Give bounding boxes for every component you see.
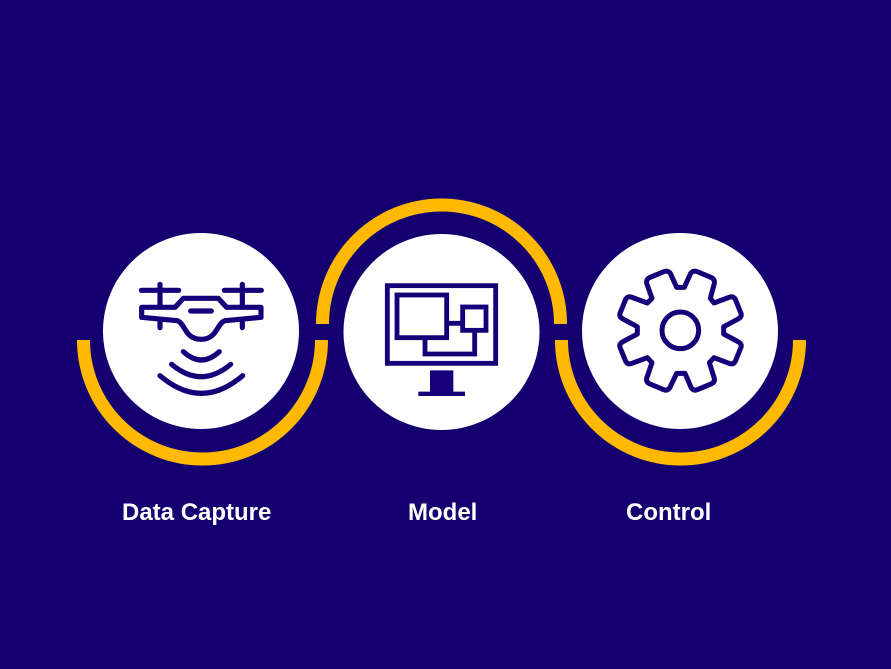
icon: gear bbox=[620, 271, 741, 390]
arc: over model bbox=[322, 205, 560, 324]
icon: monitor with linked blocks bbox=[387, 286, 496, 396]
circle: model bbox=[344, 234, 540, 430]
label: data capture: Data Capture bbox=[122, 499, 271, 526]
arc: under control bbox=[562, 340, 800, 459]
label: model: Model bbox=[408, 499, 477, 526]
icon: drone with signal waves bbox=[141, 284, 261, 393]
label: control: Control bbox=[626, 499, 711, 526]
circle: control bbox=[582, 233, 778, 429]
circle: data capture bbox=[103, 233, 299, 429]
arc: under data capture bbox=[84, 340, 322, 459]
